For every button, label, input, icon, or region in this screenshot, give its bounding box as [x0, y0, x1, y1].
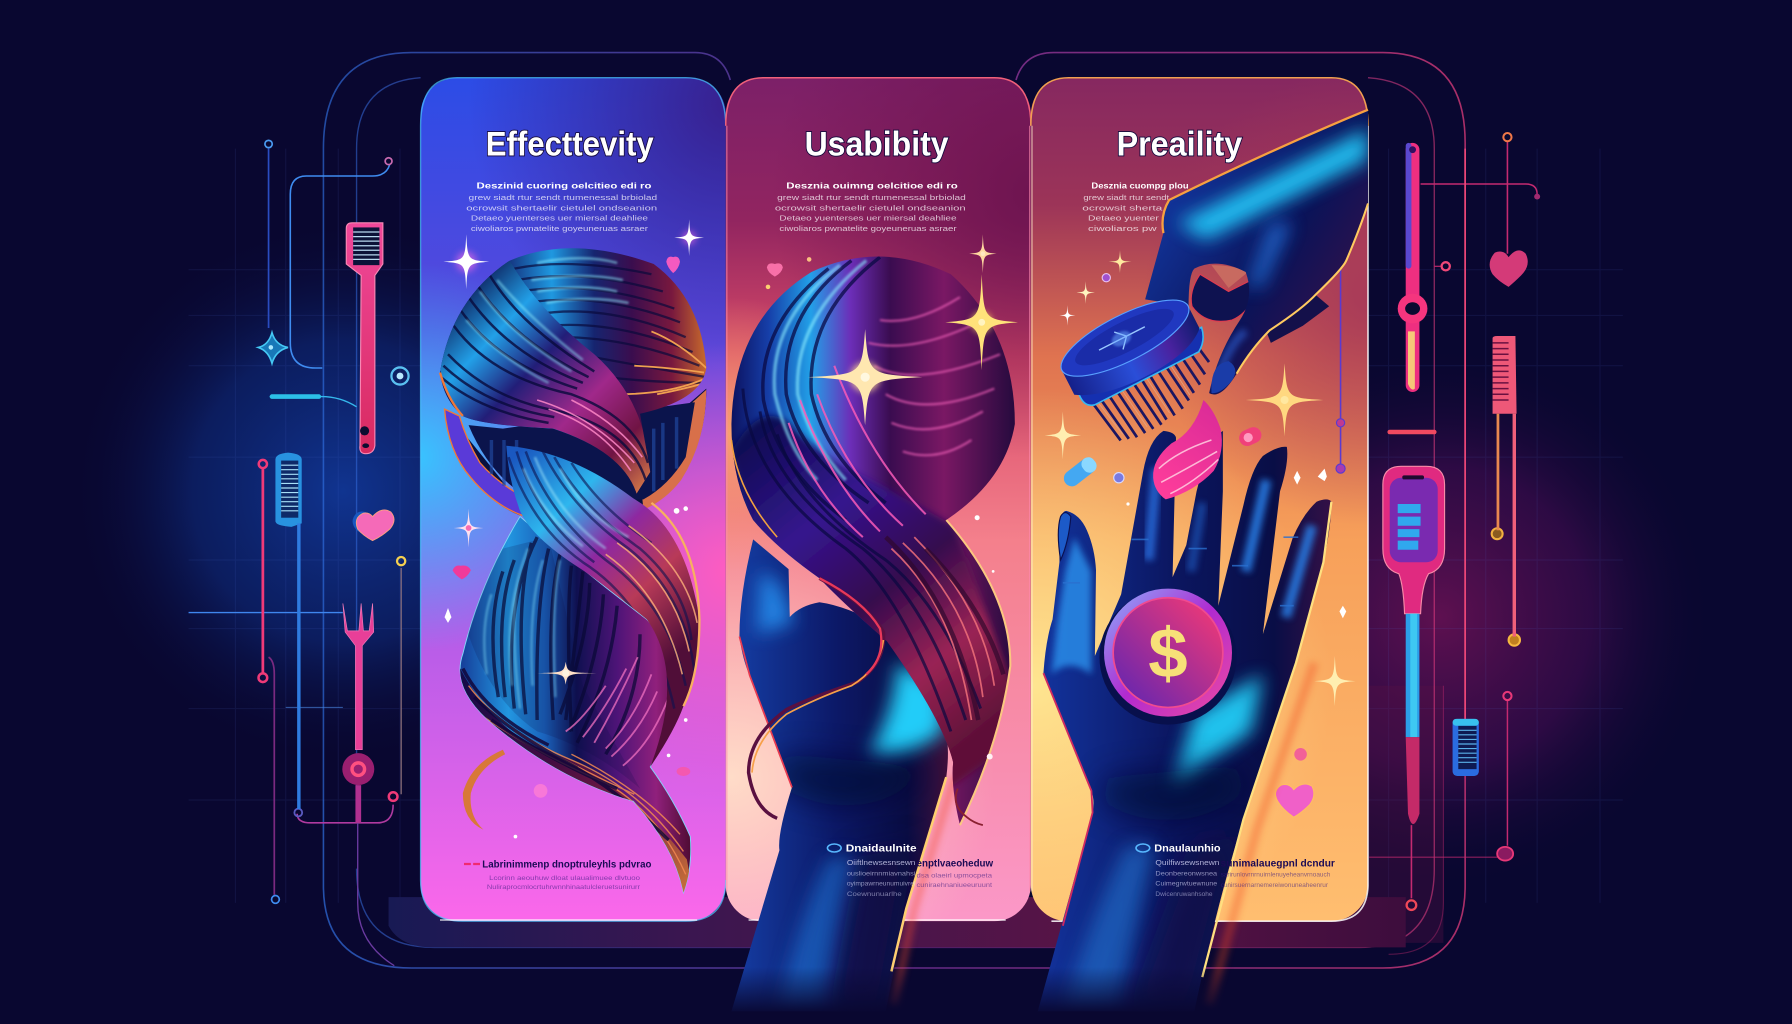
text block: usability description — [775, 182, 966, 233]
text block: preaility footer: Quilfiwsewsnewn — [1155, 858, 1219, 867]
coin — [1099, 589, 1237, 725]
text block: effectivity description: grew siadt rtur sendt rtumenessal brbiolad — [469, 193, 657, 202]
icon: heart — [353, 510, 394, 541]
icon: blue comb — [1453, 719, 1479, 776]
text block: usability description: Detaeo yuenterses uer miersal deahliee — [779, 214, 957, 223]
heading: preaility: Preaility — [1117, 125, 1242, 163]
panel: effectivity — [421, 78, 726, 921]
sparkles and items on panel 3 — [1045, 250, 1355, 817]
cross band — [506, 446, 699, 767]
back ring — [445, 389, 706, 515]
text block: preaility description: Desznia cuompg plou — [1091, 182, 1189, 191]
text block: usability footer — [827, 843, 994, 898]
dots — [1407, 133, 1540, 910]
pink hair lock — [1153, 400, 1222, 499]
text block: usability footer: oyimpawrneunumuivrel — [847, 881, 916, 888]
hair illustration: twisted hair — [440, 248, 706, 903]
hand holding hair — [731, 539, 954, 1011]
pink line with dots — [259, 460, 267, 682]
icon: blue capsule — [1061, 454, 1099, 490]
top ball — [440, 248, 706, 494]
text block: effectivity description: ocrowsit shertaelir cietulel ondseanion — [466, 203, 657, 212]
text block: preaility footer: Dwicenruwanhsohe — [1155, 891, 1213, 898]
text block: usability description: Desznia ouimng oelcitioe edi ro — [786, 182, 958, 191]
text block: preaility footer: Dnaulaunhio — [1154, 843, 1221, 854]
text block: effectivity footer: Nuliraprocmlocrtuhrwnnhinaatulcleruetsunirurr — [487, 884, 641, 891]
hand highlights — [757, 571, 943, 1011]
bottom tray — [389, 897, 1406, 947]
text block: preaility footer: sunimalauegpnl dcndur — [1221, 858, 1335, 869]
hand holding coin — [1038, 431, 1331, 1011]
hand with brush — [1051, 110, 1368, 499]
text block: effectivity description — [466, 182, 657, 233]
panel: usability — [726, 78, 1031, 921]
icon: tall pin — [1398, 143, 1427, 392]
text block: effectivity footer: Lcorinn aeouhuw dloat ulaualimuee dlvtuoo — [489, 875, 640, 882]
dots — [265, 140, 409, 903]
text block: effectivity footer — [464, 859, 651, 891]
small curl — [749, 578, 884, 818]
text block: effectivity description: Detaeo yuenterses uer miersal deahliee — [471, 214, 648, 223]
icon: device — [1383, 466, 1445, 824]
icon: sparkle diamond — [258, 333, 288, 363]
pink bar — [1387, 430, 1437, 434]
icon: blue comb — [275, 453, 302, 809]
text block: usability footer: dsa olaeirl upmocpeta — [917, 873, 992, 880]
text block: usability footer: Dnaidaulnite — [846, 843, 917, 854]
icon: heart — [1490, 250, 1528, 287]
hand rim glow — [1209, 663, 1314, 1006]
panel: preaility — [1031, 78, 1368, 921]
text block: usability footer: enptlvaeoheduw — [917, 858, 994, 869]
text block: preaility footer: Cuimegrwtuewnune — [1155, 881, 1217, 888]
text block: preaility description — [1082, 182, 1189, 233]
text block: preaility description: Detaeo yuenter — [1088, 214, 1160, 223]
text block: preaility footer: cunirsuernarnemereiwonuneaheenrur — [1221, 882, 1329, 889]
hand highlights — [1177, 128, 1368, 389]
connector lines — [189, 149, 401, 966]
bristles — [1087, 338, 1225, 449]
right side decorations — [1369, 133, 1540, 954]
text block: preaility footer — [1136, 843, 1335, 898]
purple line — [1336, 257, 1345, 473]
lower lobe — [460, 517, 691, 893]
text block: usability description: ciwoliaros pwnatelite goyeuneruas asraer — [779, 224, 957, 233]
icon: pink fork — [342, 603, 374, 823]
hole behind fingers — [1211, 265, 1248, 288]
small curl — [463, 750, 505, 830]
text block: usability description: ocrowsit shertaelir cietulel ondseanion — [775, 203, 966, 212]
heading: effectivity: Effecttevity — [486, 125, 654, 163]
brush — [1051, 285, 1233, 454]
hand highlights — [1051, 469, 1312, 1011]
connector lines — [1369, 142, 1537, 954]
text block: usability footer: ouslioeirnnmiavnahsi — [847, 870, 916, 877]
text block: usability footer: cuniraehnaniueeuruunt — [917, 882, 992, 889]
teal bar — [270, 394, 321, 399]
text block: preaility description: ciwoliaros pw — [1088, 224, 1158, 233]
outer frame — [323, 53, 1465, 968]
heading: usability: Usabibity — [805, 125, 949, 163]
text block: usability footer: Coewnunuarlhe — [847, 891, 902, 898]
far finger — [1191, 274, 1253, 321]
text block: effectivity description: Deszinid cuoring oelcitieo edi ro — [477, 182, 652, 191]
text block: usability footer: Oiiftlnewsesnsewn — [847, 858, 915, 867]
left side decorations — [189, 140, 409, 966]
sparkles and hearts in panel 1 — [443, 219, 704, 838]
text block: preaility description: ocrowsit sherta — [1082, 203, 1164, 212]
text block: usability description: grew siadt rtur sendt rtumenessal brbiolad — [777, 193, 966, 202]
text block: preaility footer: Deonbereonwsnea — [1155, 870, 1217, 877]
text block: preaility footer: sarirunlovrnrnuirnlenuyeheanvrnoauch — [1221, 872, 1330, 879]
hand — [1145, 110, 1368, 395]
text block: preaility description: grew siadt rtur sendt — [1083, 193, 1169, 202]
icon: pink capsule — [1237, 424, 1264, 449]
icon: pink comb — [1493, 336, 1517, 637]
text block: effectivity description: ciwoliaros pwnatelite goyeuneruas asraer — [471, 224, 649, 233]
sparkle on hair — [535, 662, 597, 685]
icon: pink comb — [346, 223, 383, 454]
bottom fade — [720, 967, 1234, 1015]
sparkles on panel 2 — [766, 234, 1018, 760]
hair illustration: flowing hair — [731, 257, 1029, 825]
dollar sign: $ — [1148, 615, 1188, 694]
text block: effectivity footer: Labrinimmenp dnoptruleyhls pdvrao — [482, 859, 651, 870]
